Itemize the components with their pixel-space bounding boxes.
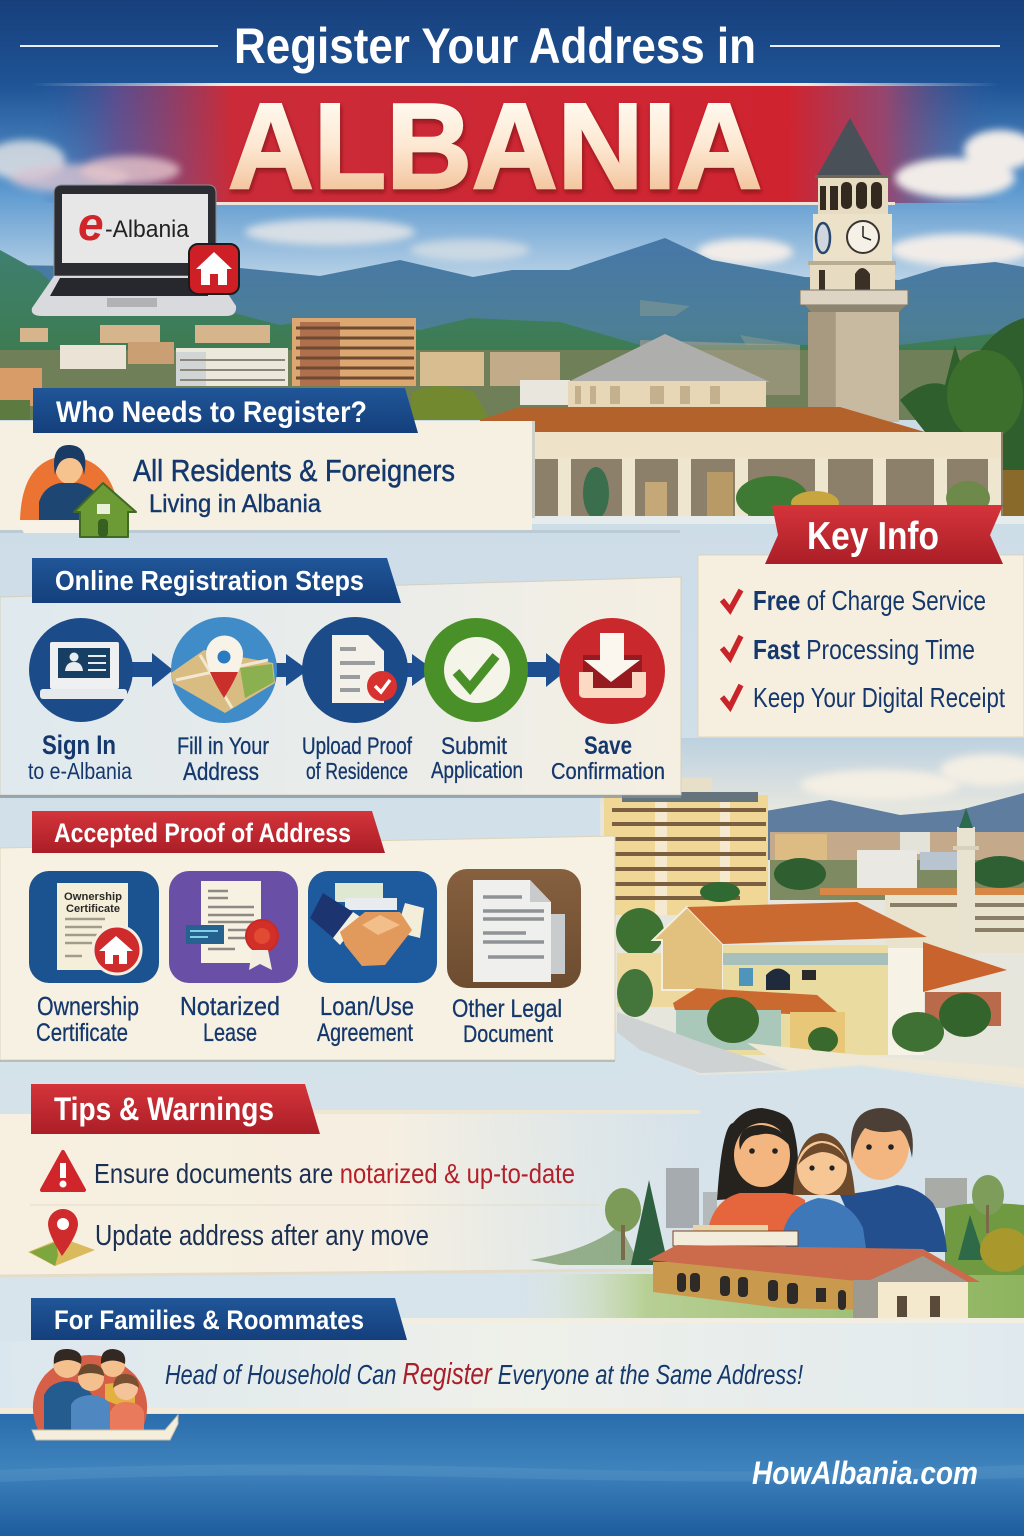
house (648, 1245, 980, 1320)
panel: key info (698, 505, 1024, 737)
card: loan use agreement: Agreement (317, 1019, 413, 1047)
step: sign in: Sign In (42, 730, 116, 760)
item: free of charge: Free of Charge Service (753, 585, 986, 616)
panel: online registration steps (0, 558, 681, 798)
heading: accepted proof of address (32, 811, 385, 853)
heading: who needs to register: Who Needs to Register? (56, 396, 367, 429)
panel: tips and warnings (0, 1084, 700, 1277)
clock tower (800, 118, 908, 422)
step: sign in: to e-Albania (28, 758, 132, 784)
heading: for families and roommates (31, 1298, 407, 1340)
card: ownership certificate: Certificate (36, 1019, 128, 1047)
mosque building (480, 334, 1003, 520)
step: sign in (28, 618, 133, 784)
heading: key info (765, 505, 1003, 564)
tip: update address: Update address after any move (95, 1220, 429, 1252)
heading: accepted proof of address: Accepted Proof of Address (54, 818, 351, 848)
step: fill in address (171, 617, 277, 786)
step: submit application: Application (431, 757, 523, 783)
step: upload proof: of Residence (306, 758, 408, 784)
text: head of household: Head of Household Can Register Everyone at the Same Address! (165, 1356, 803, 1391)
heading: who needs to register (33, 388, 418, 433)
card: other legal document: Other Legal (452, 995, 562, 1023)
books (673, 1225, 798, 1246)
heading: tips and warnings: Tips & Warnings (54, 1091, 274, 1127)
sea footer (0, 1414, 1024, 1536)
card: other legal document: Document (463, 1021, 553, 1048)
step: save confirmation (551, 618, 665, 784)
card: loan use agreement: Loan/Use (320, 991, 414, 1021)
heading: key info: Key Info (807, 515, 939, 558)
warning: documents notarized: Ensure documents are notarized & up-to-date (94, 1158, 575, 1189)
red banner with ALBANIA: ALBANIA (228, 78, 762, 214)
heading: for families and roommates: For Families & Roommates (54, 1305, 364, 1335)
card: notarized lease: Notarized (180, 991, 280, 1021)
card: loan use agreement (308, 871, 437, 1047)
card: ownership certificate (29, 871, 159, 1047)
step: submit application: Submit (441, 733, 507, 760)
family illustration (520, 1108, 1024, 1320)
website footer: HowAlbania.com (752, 1455, 978, 1491)
man (840, 1108, 947, 1252)
laptop: e-Albania: e (78, 198, 104, 250)
card: ownership certificate: Ownership (37, 991, 139, 1021)
red banner with ALBANIA (30, 78, 1000, 214)
icon: person with house (17, 445, 136, 537)
laptop: e-Albania (32, 185, 239, 316)
step: fill in address: Fill in Your (177, 733, 269, 760)
warning: documents notarized (42, 1152, 575, 1190)
card: other legal document (447, 869, 581, 1048)
card: notarized lease: Lease (203, 1019, 257, 1047)
icon: family group (32, 1349, 178, 1440)
card: ownership certificate: Ownership (64, 891, 122, 903)
mountains and city skyline (0, 238, 1024, 420)
step: save confirmation: Save (584, 732, 632, 760)
tree group by the tower (900, 318, 1024, 516)
step: upload proof: Upload Proof (302, 733, 412, 760)
card: notarized lease (169, 871, 298, 1047)
laptop: e-Albania: -Albania (105, 216, 190, 243)
item: fast processing: Fast Processing Time (753, 634, 975, 665)
panel: who needs to register (0, 388, 1024, 537)
step: fill in address: Address (183, 758, 259, 786)
tip: update address (28, 1209, 429, 1266)
card: ownership certificate: Certificate (66, 903, 120, 915)
arrows between steps (130, 653, 567, 687)
heading: online registration steps: Online Registration Steps (55, 565, 364, 596)
step: upload proof (302, 617, 412, 784)
town illustration (600, 738, 1024, 1088)
woman (707, 1108, 805, 1238)
girl (783, 1133, 866, 1248)
heading: tips and warnings (31, 1084, 320, 1134)
text: all residents and foreigners: All Residents & Foreigners (133, 453, 455, 488)
clouds (0, 130, 1024, 266)
panel: for families and roommates (0, 1298, 1024, 1413)
heading: online registration steps (32, 558, 401, 603)
panel: accepted proof of address (0, 811, 615, 1062)
text: living in Albania: Living in Albania (149, 490, 321, 518)
step: submit application (424, 618, 528, 783)
title: Register Your Address in (234, 18, 756, 74)
step: save confirmation: Confirmation (551, 758, 665, 784)
